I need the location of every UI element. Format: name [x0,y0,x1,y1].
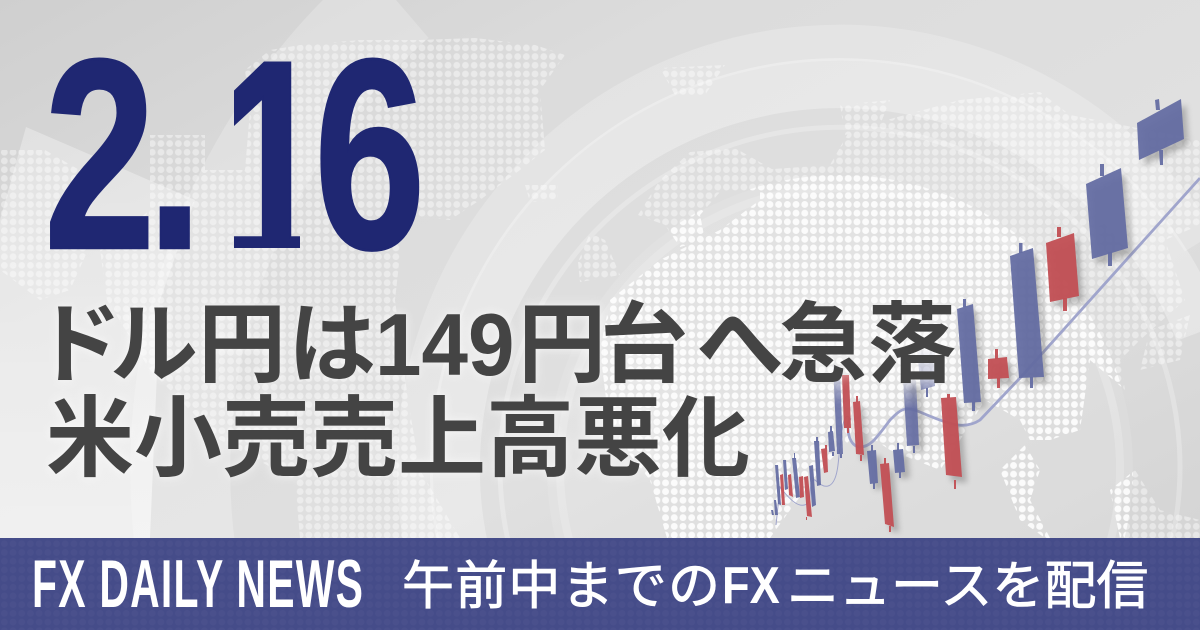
footer bar [0,538,1200,630]
headline glow: ドル円は [34,295,376,394]
trend line [776,178,1200,525]
candlestick chart [771,99,1200,533]
headline glow: 円台へ急落 [518,295,956,394]
date heading: 2 [44,2,156,306]
headline line 1: 円台へ急落 [518,295,956,394]
date heading [50,58,420,252]
date heading: 1 [216,0,328,331]
red candles [780,227,1079,532]
headline glow [34,295,956,488]
headline [34,295,956,488]
headline line 1: ドル円は [34,295,376,394]
footer brand text: FX DAILY NEWS [32,545,364,622]
footer description: ニュースを配信 [787,558,1148,616]
headline line 1 [34,295,956,394]
blue candles [771,99,1184,515]
headline glow: 米小売売上高悪化 [46,389,750,488]
date heading: 6 [314,2,426,306]
candle shadows [858,105,1189,533]
headline line 2: 米小売売上高悪化 [46,389,750,488]
footer description: 午前中までの [402,558,721,616]
footer description: FX [722,557,780,615]
date heading: . [147,2,203,306]
headline line 1: 149 [375,296,514,394]
headline glow: 149 [375,296,514,394]
footer description [402,557,1148,616]
